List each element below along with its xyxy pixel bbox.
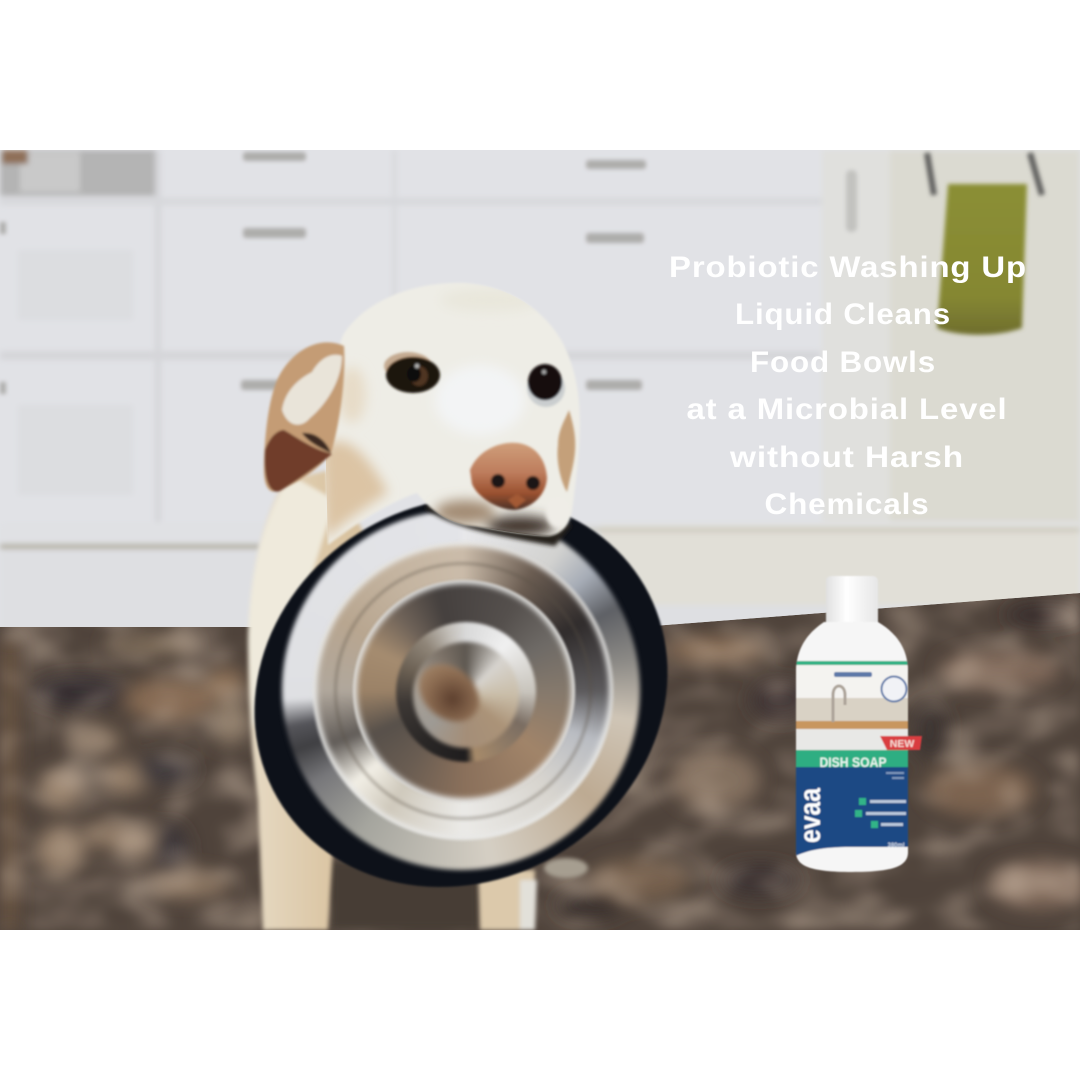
product name: DISH SOAP — [820, 755, 886, 770]
wooden floor — [0, 590, 1080, 930]
green band — [796, 750, 910, 768]
bright inner lip — [313, 542, 613, 840]
volume: 380ml — [887, 843, 905, 849]
dog nose — [470, 443, 547, 510]
blue panel — [796, 767, 910, 856]
dog chest and legs — [248, 470, 588, 930]
thin steel ring — [334, 562, 592, 820]
bowl centre disc — [396, 622, 536, 762]
new badge — [880, 736, 922, 750]
baseboard — [0, 524, 1080, 606]
bottle body — [795, 621, 910, 873]
floor between legs — [330, 860, 480, 930]
shadow under muzzle — [425, 490, 572, 546]
headline text: Food Bowls — [750, 346, 936, 379]
kitchen background photo with dog body — [0, 150, 1080, 930]
muzzle white lip — [546, 496, 570, 528]
centre reflection — [413, 642, 519, 748]
black bowl rim — [183, 422, 739, 962]
headline text: Probiotic Washing Up — [669, 251, 1027, 284]
dog eyes — [384, 352, 565, 407]
round badge — [882, 676, 906, 702]
bowl base — [357, 584, 571, 798]
brand logo mark — [834, 672, 872, 677]
label bullet ticks — [859, 798, 866, 805]
new badge: NEW — [890, 738, 914, 750]
outer steel band — [282, 510, 640, 870]
bright middle ring — [353, 580, 575, 802]
middle steel band — [317, 546, 609, 836]
cabinets — [0, 150, 1080, 540]
headline text: without Harsh — [729, 441, 964, 474]
headline text: Liquid Cleans — [735, 298, 951, 331]
neck and head shape — [326, 283, 580, 545]
bottle cap — [826, 576, 878, 625]
cabinet handles — [0, 152, 857, 394]
product bottle — [795, 576, 923, 873]
headline text: Chemicals — [764, 488, 930, 521]
dog head — [262, 284, 580, 549]
near ear — [264, 342, 344, 492]
food bowl — [252, 502, 669, 888]
right ear edge — [557, 410, 575, 492]
head shading — [322, 288, 554, 540]
towel on rail — [927, 153, 1042, 335]
headline text: at a Microbial Level — [686, 393, 1008, 426]
dog reflection blob — [408, 653, 490, 733]
brand name: evaa — [794, 788, 827, 843]
